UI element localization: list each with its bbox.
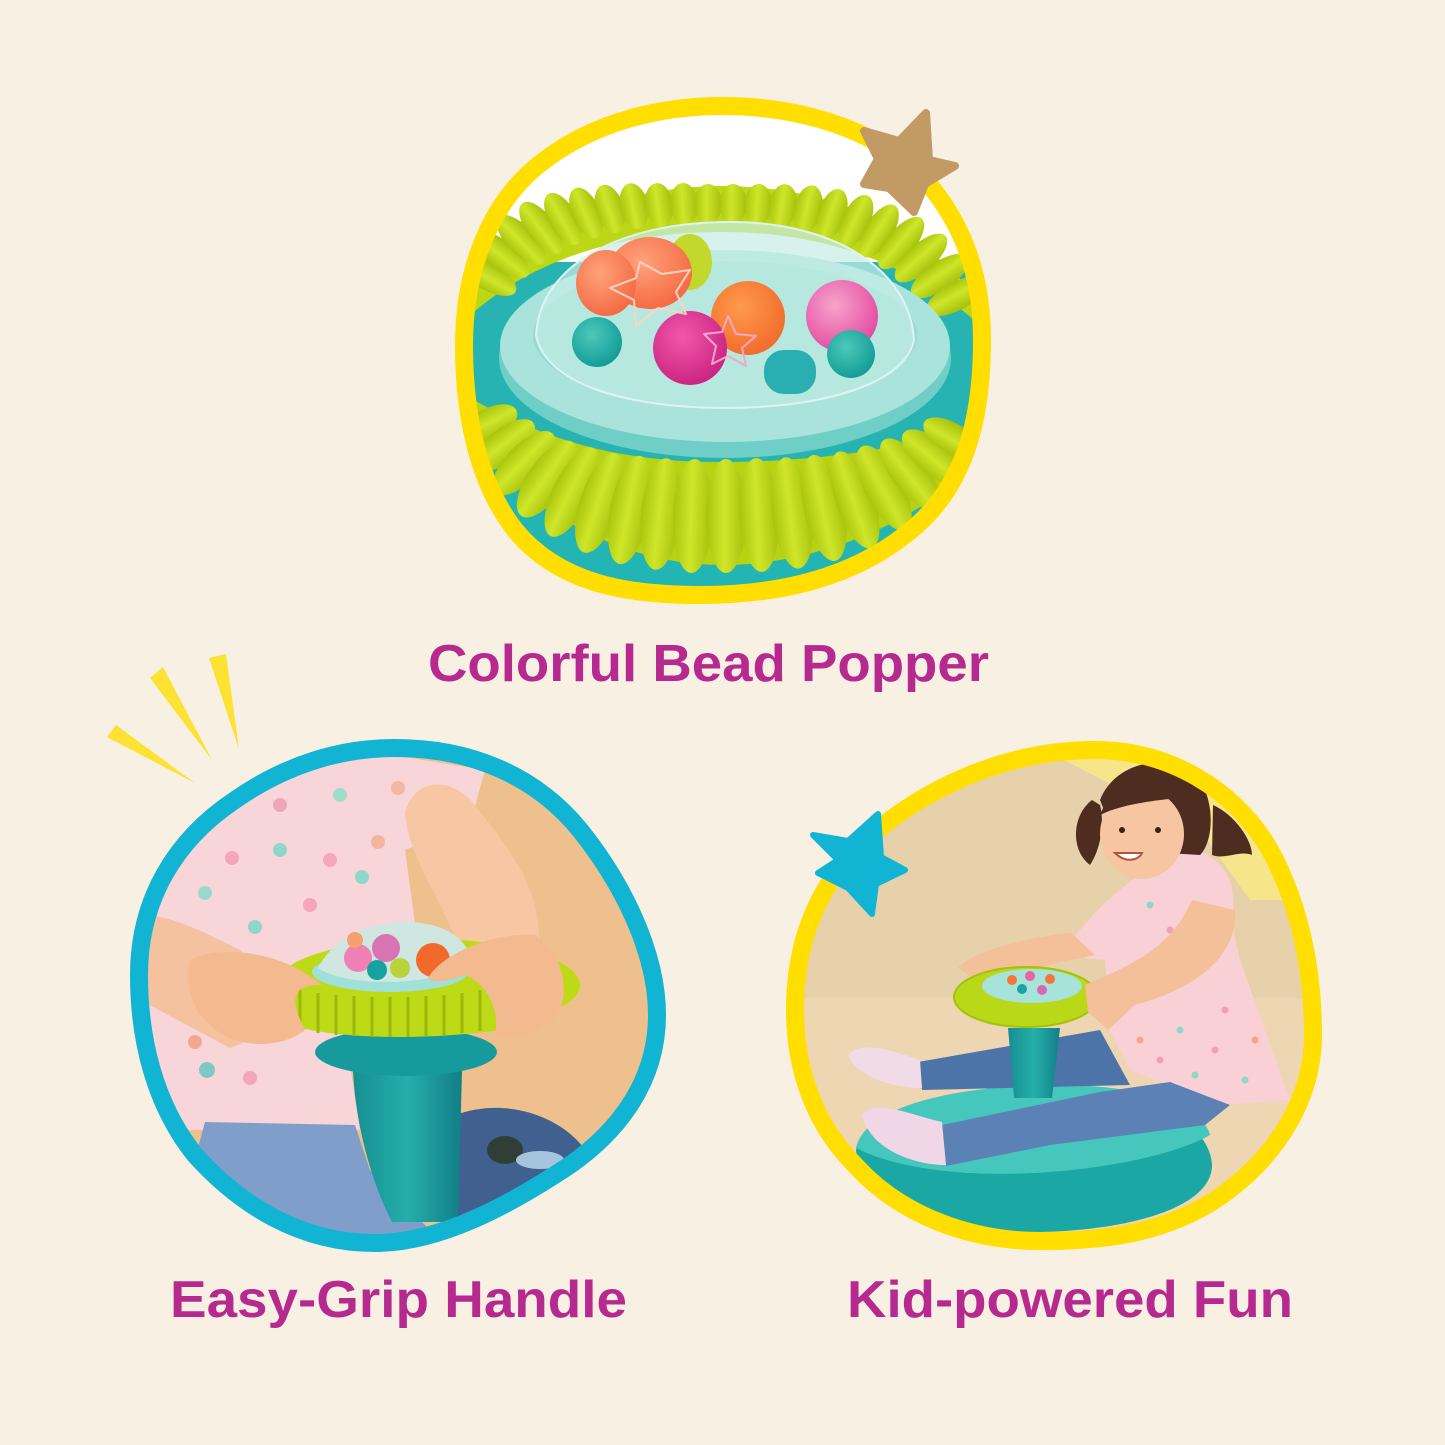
- heading: colorful bead popper: Colorful Bead Popper: [428, 635, 989, 693]
- wood wall: [804, 760, 1302, 998]
- clear dome: [536, 222, 914, 408]
- teal seat disk: [856, 1085, 1212, 1232]
- teal base: [504, 492, 922, 586]
- smile: [1115, 853, 1142, 860]
- pink shirt: [130, 745, 485, 1130]
- icon: kraft star: [864, 113, 955, 212]
- teal hub: [473, 262, 973, 476]
- near leg: [942, 1082, 1230, 1166]
- shirt dots: [188, 781, 405, 1085]
- left hand: [188, 952, 322, 1044]
- steering ring: [954, 967, 1098, 1027]
- green ribbed handle front: [296, 1008, 496, 1037]
- near sock: [862, 1108, 946, 1165]
- hair back: [1100, 763, 1211, 855]
- dome recess: [533, 317, 917, 378]
- bottom ribbed ring: [478, 404, 964, 573]
- teal stem: [1008, 1028, 1060, 1098]
- heading: kid-powered fun: Kid-powered Fun: [847, 1271, 1293, 1329]
- icon: yellow burst lines: [107, 654, 239, 783]
- right arm: [1085, 900, 1235, 1030]
- light teal popper rim: [499, 348, 951, 458]
- steering hub: [982, 969, 1082, 1003]
- small dome beads: [1007, 971, 1055, 995]
- top ribbed ring: [478, 183, 970, 316]
- pink shirt: [1072, 850, 1290, 1105]
- green ring back: [290, 940, 580, 1008]
- beads small: [344, 932, 450, 980]
- yellow blob outline: [795, 750, 1313, 1241]
- left arm: [958, 932, 1095, 985]
- warm backdrop: [188, 757, 648, 1226]
- far sock: [848, 1047, 922, 1088]
- heading: easy-grip handle: Easy-Grip Handle: [170, 1271, 627, 1329]
- teal stem: [353, 1070, 462, 1222]
- yellow blob outline: [464, 106, 982, 595]
- dome: [312, 962, 467, 992]
- left arm: [148, 916, 244, 1048]
- top green band: [474, 186, 972, 319]
- yellow wall accent: [1065, 759, 1282, 900]
- photo backdrop: [496, 115, 958, 262]
- girl's far leg: [918, 1030, 1130, 1090]
- shirt dots: [1136, 902, 1258, 1084]
- jeans patches: [487, 1136, 564, 1169]
- jeans: [198, 1122, 426, 1234]
- icon: blue star: [813, 814, 905, 914]
- blue blob outline: [139, 748, 657, 1243]
- bottom green band: [476, 401, 942, 565]
- face: [1100, 789, 1184, 879]
- right arm: [405, 784, 540, 942]
- beads: [572, 234, 878, 394]
- panel: colorful bead popper photo: [450, 95, 1000, 605]
- teal collar: [315, 1034, 497, 1076]
- panel: easy-grip handle photo: [130, 740, 670, 1250]
- panel: kid-powered fun photo: [780, 740, 1330, 1258]
- floor: [806, 1040, 1304, 1232]
- right hand: [428, 935, 564, 1037]
